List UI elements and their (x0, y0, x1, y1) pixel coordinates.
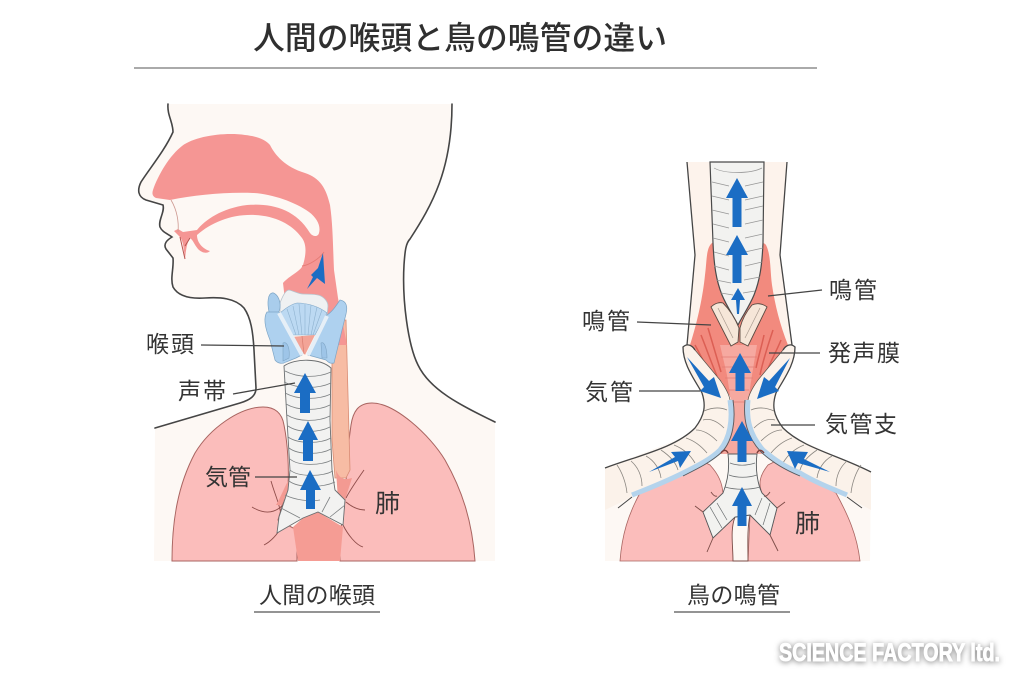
small arytenoid knobs (283, 343, 327, 361)
title: 人間の喉頭と鳥の鳴管の違い (253, 20, 667, 56)
nasal cavity and airway (152, 134, 347, 345)
lower trachea and fork (695, 450, 785, 561)
label: bird lungs: 肺 (795, 510, 820, 538)
pink central column (720, 345, 762, 454)
label: vocal cords: 声帯 (178, 378, 226, 404)
bronchi (605, 345, 871, 510)
esophagus (332, 320, 350, 478)
label: syrinx right: 鳴管 (829, 277, 877, 303)
outer neck tube (687, 162, 792, 393)
trachea airflow arrows (294, 373, 321, 509)
head and torso skin (139, 104, 495, 561)
left horn (268, 293, 280, 315)
lower central tube (293, 512, 343, 561)
neck outlines (139, 104, 495, 428)
panel: bird syrinx (605, 162, 871, 561)
label: trachea left: 気管 (585, 379, 633, 405)
caption: bird syrinx: 鳥の鳴管 (687, 582, 780, 608)
upper trachea (710, 162, 764, 325)
right thyroid wing (308, 300, 347, 363)
label: vocal membrane: 発声膜 (828, 340, 900, 366)
white cartilage diagonals (279, 313, 327, 355)
syrinx muscle (690, 242, 788, 454)
bird airflow arrows (649, 178, 830, 526)
lung vessels (252, 470, 365, 547)
labels: human (146, 331, 400, 518)
label: larynx: 喉頭 (146, 331, 194, 357)
lungs (172, 403, 475, 561)
panel: human larynx (139, 104, 495, 561)
label: trachea: 気管 (205, 464, 251, 490)
neck outlines (687, 162, 792, 345)
body background (605, 430, 871, 561)
label: bronchi: 気管支 (825, 411, 897, 437)
trachea (277, 360, 345, 533)
airflow arrow in throat (307, 253, 325, 289)
label: syrinx left: 鳴管 (582, 308, 630, 334)
caption: human larynx: 人間の喉頭 (259, 582, 375, 608)
label: lungs: 肺 (375, 490, 400, 518)
larynx cartilage (265, 290, 347, 363)
vocal folds (291, 335, 315, 355)
bird lungs (620, 460, 860, 561)
left thyroid wing (265, 312, 302, 363)
blue membrane bands (632, 400, 731, 495)
central shield (280, 303, 327, 335)
labels: bird (582, 277, 900, 538)
syrinx cartilage plates (711, 303, 767, 346)
caption: bird syrinx (674, 582, 790, 612)
hyoid white cap (280, 290, 328, 316)
